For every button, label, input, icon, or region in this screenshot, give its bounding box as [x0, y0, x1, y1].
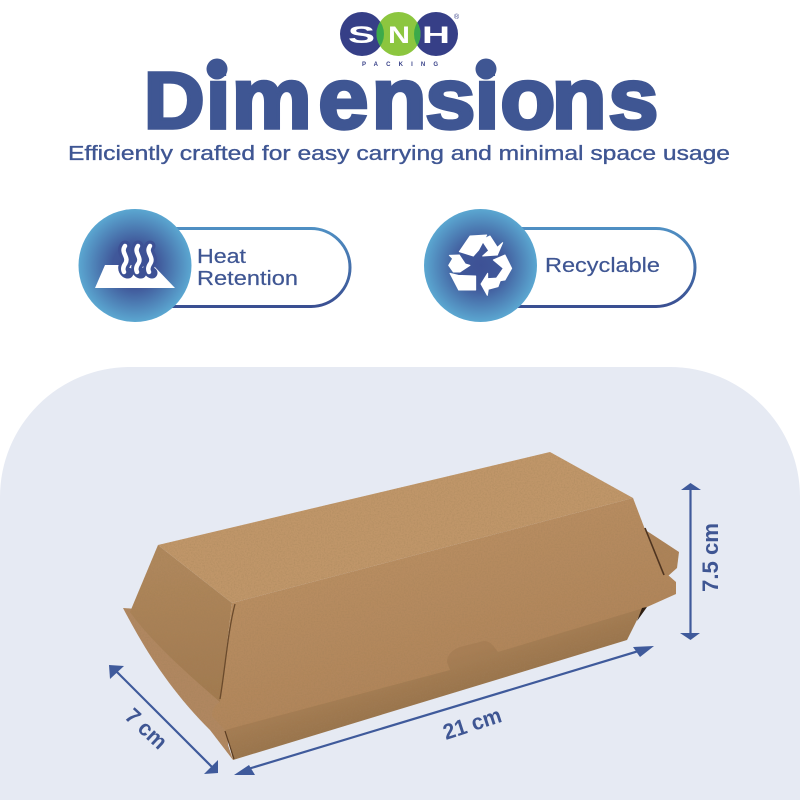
lid left end: [130, 545, 232, 702]
tray front: [225, 600, 648, 760]
lid front: [212, 498, 676, 730]
title: imensions: [206, 50, 658, 147]
logo: SNH Packing: N: [388, 22, 410, 49]
box creases: [220, 528, 664, 759]
label: heat retention: Retention: [197, 268, 298, 290]
panel: dimensions background: [0, 367, 800, 800]
arrow: depth 7 cm: [109, 665, 218, 774]
label: 7.5 cm: 7.5 cm: [698, 523, 723, 592]
label: recyclable: Recyclable: [545, 254, 660, 277]
badge: recyclable: [424, 209, 695, 322]
left tray flap: [123, 608, 233, 760]
label: heat retention: [197, 246, 298, 290]
logo: SNH Packing: ®: [454, 13, 460, 21]
label: 21 cm: 21 cm: [440, 702, 505, 745]
logo: SNH Packing: S: [348, 22, 375, 49]
label: 7 cm: 7 cm: [120, 703, 172, 754]
subtitle: Efficiently crafted for easy carrying and minimal space usage: [68, 142, 730, 165]
title: D: [144, 57, 205, 146]
pill outline: [480, 228, 695, 306]
logo: SNH Packing: H: [422, 22, 450, 49]
arrow: height 7.5 cm: [680, 483, 701, 640]
lid top: [158, 452, 633, 603]
right back flap: [645, 530, 679, 576]
arrow: length 21 cm: [234, 646, 654, 775]
badge: heat retention: [78, 209, 350, 322]
label: heat retention: Heat: [197, 246, 247, 268]
icon: heat rising from surface: [78, 209, 192, 322]
logo: SNH Packing: [340, 12, 460, 68]
icon: recycling arrows: [424, 209, 537, 322]
kraft hot dog box: [123, 452, 679, 760]
pill outline: [135, 228, 350, 306]
logo: SNH Packing: PACKING: [362, 62, 438, 68]
